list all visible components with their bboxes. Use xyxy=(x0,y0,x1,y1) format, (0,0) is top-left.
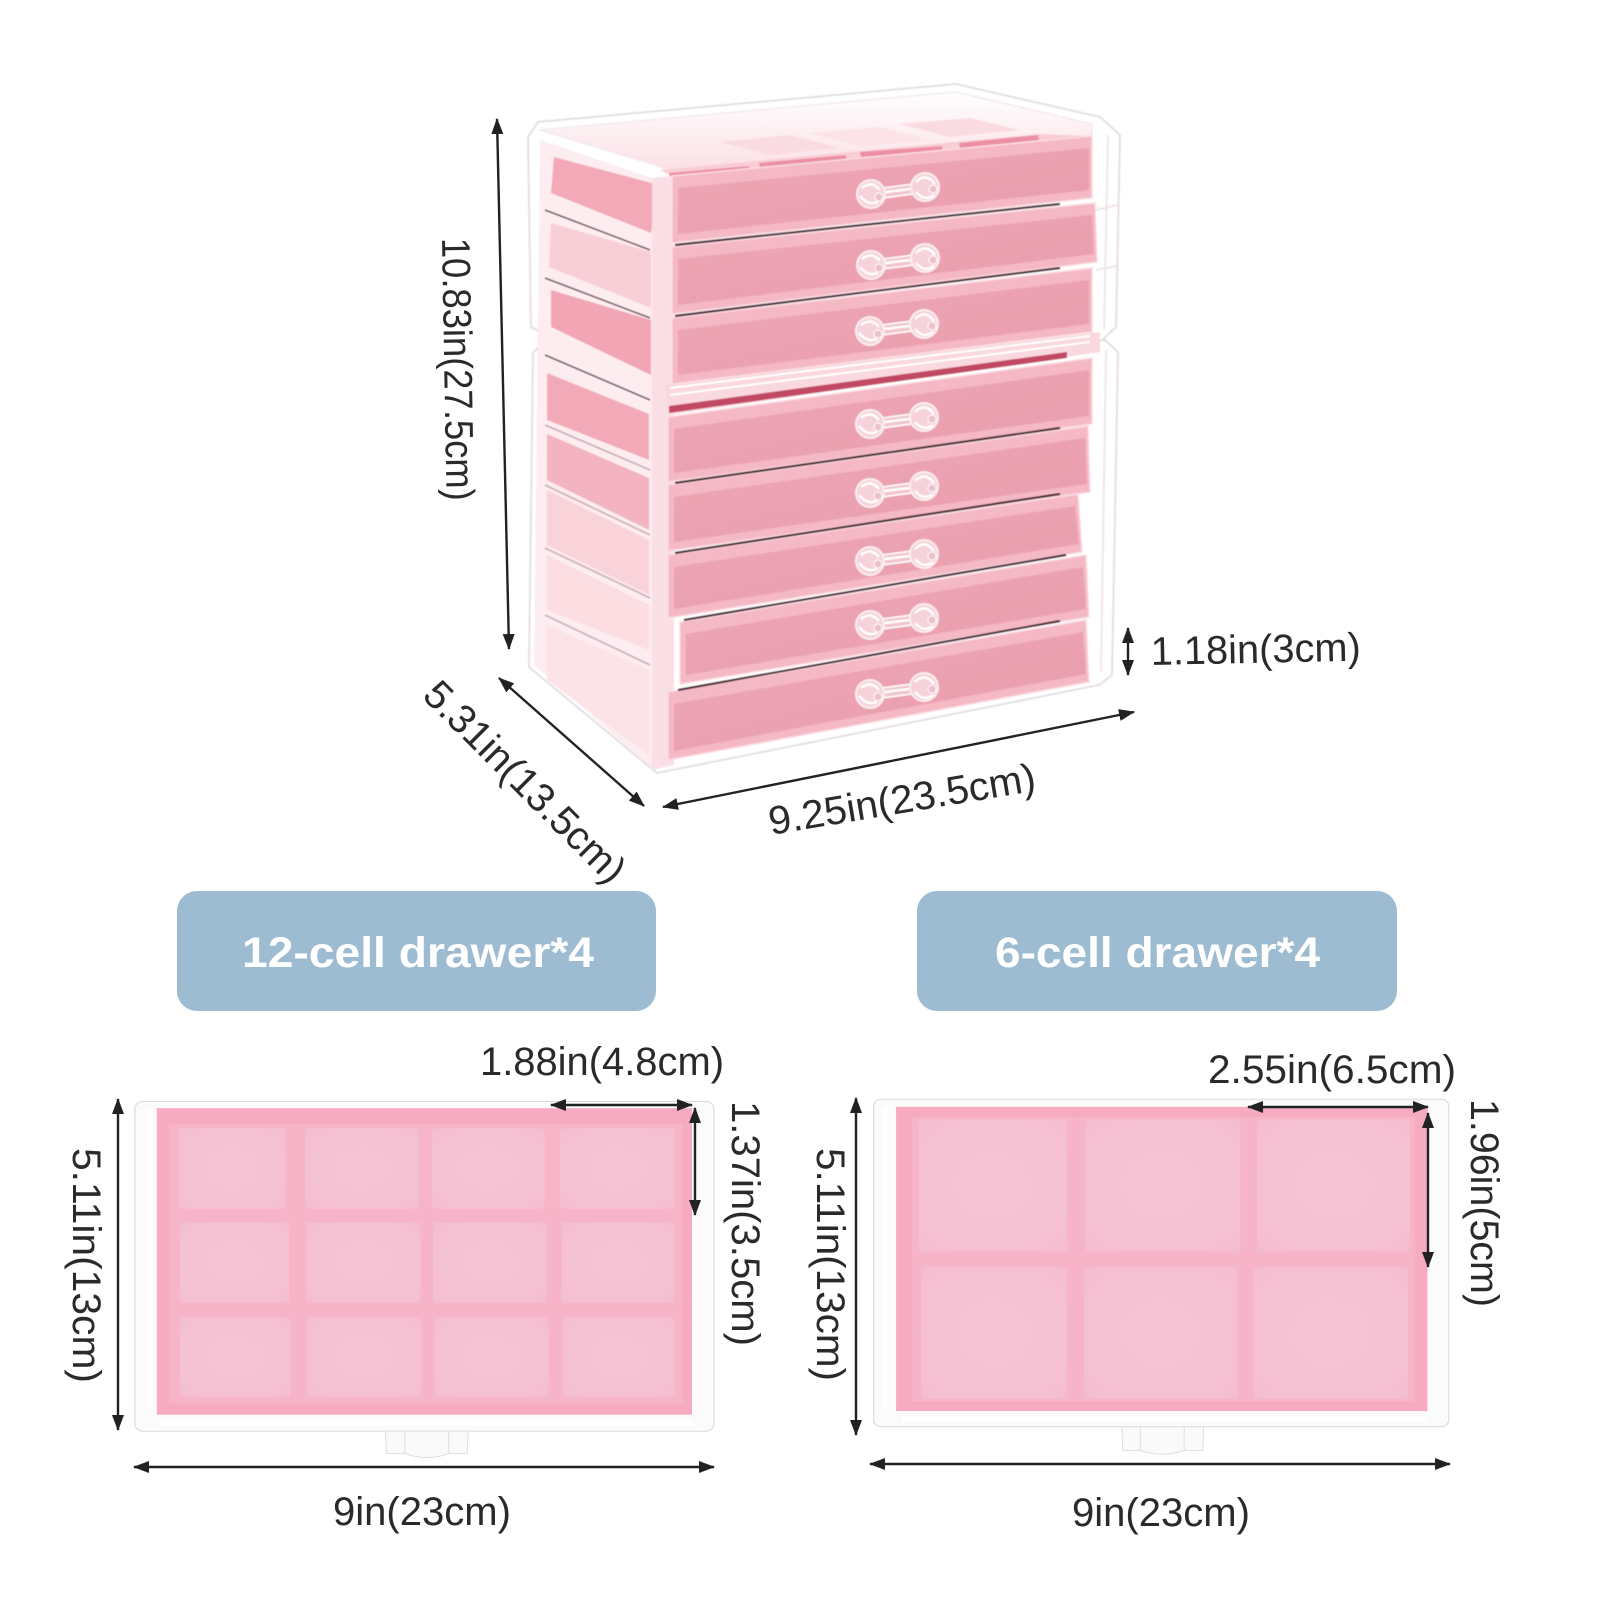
left side panels xyxy=(545,157,659,755)
label: 6-cell width: 9in(23cm) xyxy=(1072,1491,1250,1535)
left side backing xyxy=(534,140,652,768)
arrow: 12-cell height xyxy=(117,1099,119,1430)
arrow: 6-cell cell depth xyxy=(1427,1113,1429,1267)
drawer 6 xyxy=(668,494,1082,618)
label: width: 9.25in(23.5cm) xyxy=(765,756,1039,844)
tray shell xyxy=(135,1101,714,1431)
upper case outline xyxy=(528,84,1120,392)
drawer 5 xyxy=(668,426,1090,551)
drawer: 12-cell tray xyxy=(135,1101,714,1458)
drawer 4 xyxy=(668,358,1092,482)
tray dividers backdrop xyxy=(169,1124,682,1403)
lid top xyxy=(540,92,1092,178)
right side inner lines xyxy=(1096,135,1118,672)
front pillar xyxy=(652,176,674,770)
tray lining xyxy=(157,1108,692,1415)
drawer 7 xyxy=(680,555,1089,684)
tray dividers backdrop xyxy=(912,1117,1415,1401)
button: 6-cell drawer xyxy=(917,891,1397,1011)
cells xyxy=(919,1119,1410,1399)
arrow: 6-cell height xyxy=(855,1098,857,1435)
tray pull handle xyxy=(1122,1427,1204,1454)
label: cell depth: 1.37in(3.5cm) xyxy=(723,1101,767,1346)
product: stacked acrylic drawer organizer xyxy=(528,84,1120,773)
arrow: 6-cell width xyxy=(870,1463,1450,1465)
drawer 8 xyxy=(668,620,1089,760)
drawer 1 xyxy=(672,136,1092,243)
gap between stacked cases xyxy=(665,332,1100,415)
button: 6-cell drawer: 6-cell drawer*4 xyxy=(995,929,1320,977)
arrow: cell width xyxy=(551,1104,692,1106)
label: 6-cell cell depth: 1.96in(5cm) xyxy=(1462,1099,1506,1307)
arrow: 6-cell cell width xyxy=(1248,1106,1428,1108)
drawer: 6-cell tray xyxy=(874,1099,1449,1454)
drawer 2 xyxy=(672,203,1097,314)
cells xyxy=(179,1128,675,1397)
tray pull handle xyxy=(385,1431,468,1458)
label: drawer height: 1.18in(3cm) xyxy=(1150,626,1361,674)
label: 12-cell height: 5.11in(13cm) xyxy=(64,1148,108,1383)
tray lining xyxy=(896,1107,1427,1411)
label: 6-cell height: 5.11in(13cm) xyxy=(808,1148,852,1381)
label: depth: 5.31in(13.5cm) xyxy=(415,672,635,892)
shell highlights xyxy=(885,1106,1427,1419)
button: 12-cell drawer: 12-cell drawer*4 xyxy=(242,929,594,977)
tray shell xyxy=(874,1099,1449,1427)
button: 12-cell drawer xyxy=(177,891,656,1011)
label: overall height: 10.83in(27.5cm) xyxy=(433,237,482,501)
label: cell width: 1.88in(4.8cm) xyxy=(480,1040,724,1084)
arrow: depth xyxy=(499,678,644,806)
drawer handles xyxy=(856,173,939,708)
arrow: drawer height xyxy=(1127,628,1129,675)
lower case outline xyxy=(529,340,1118,773)
label: 12-cell width: 9in(23cm) xyxy=(333,1490,511,1534)
drawer 3 xyxy=(672,268,1092,384)
shell highlights xyxy=(149,1108,692,1422)
arrow: cell depth xyxy=(694,1108,696,1215)
arrow: width xyxy=(663,712,1134,807)
arrow: 12-cell width xyxy=(134,1466,714,1468)
arrow: overall height xyxy=(497,119,509,649)
label: 6-cell cell width: 2.55in(6.5cm) xyxy=(1208,1048,1456,1092)
